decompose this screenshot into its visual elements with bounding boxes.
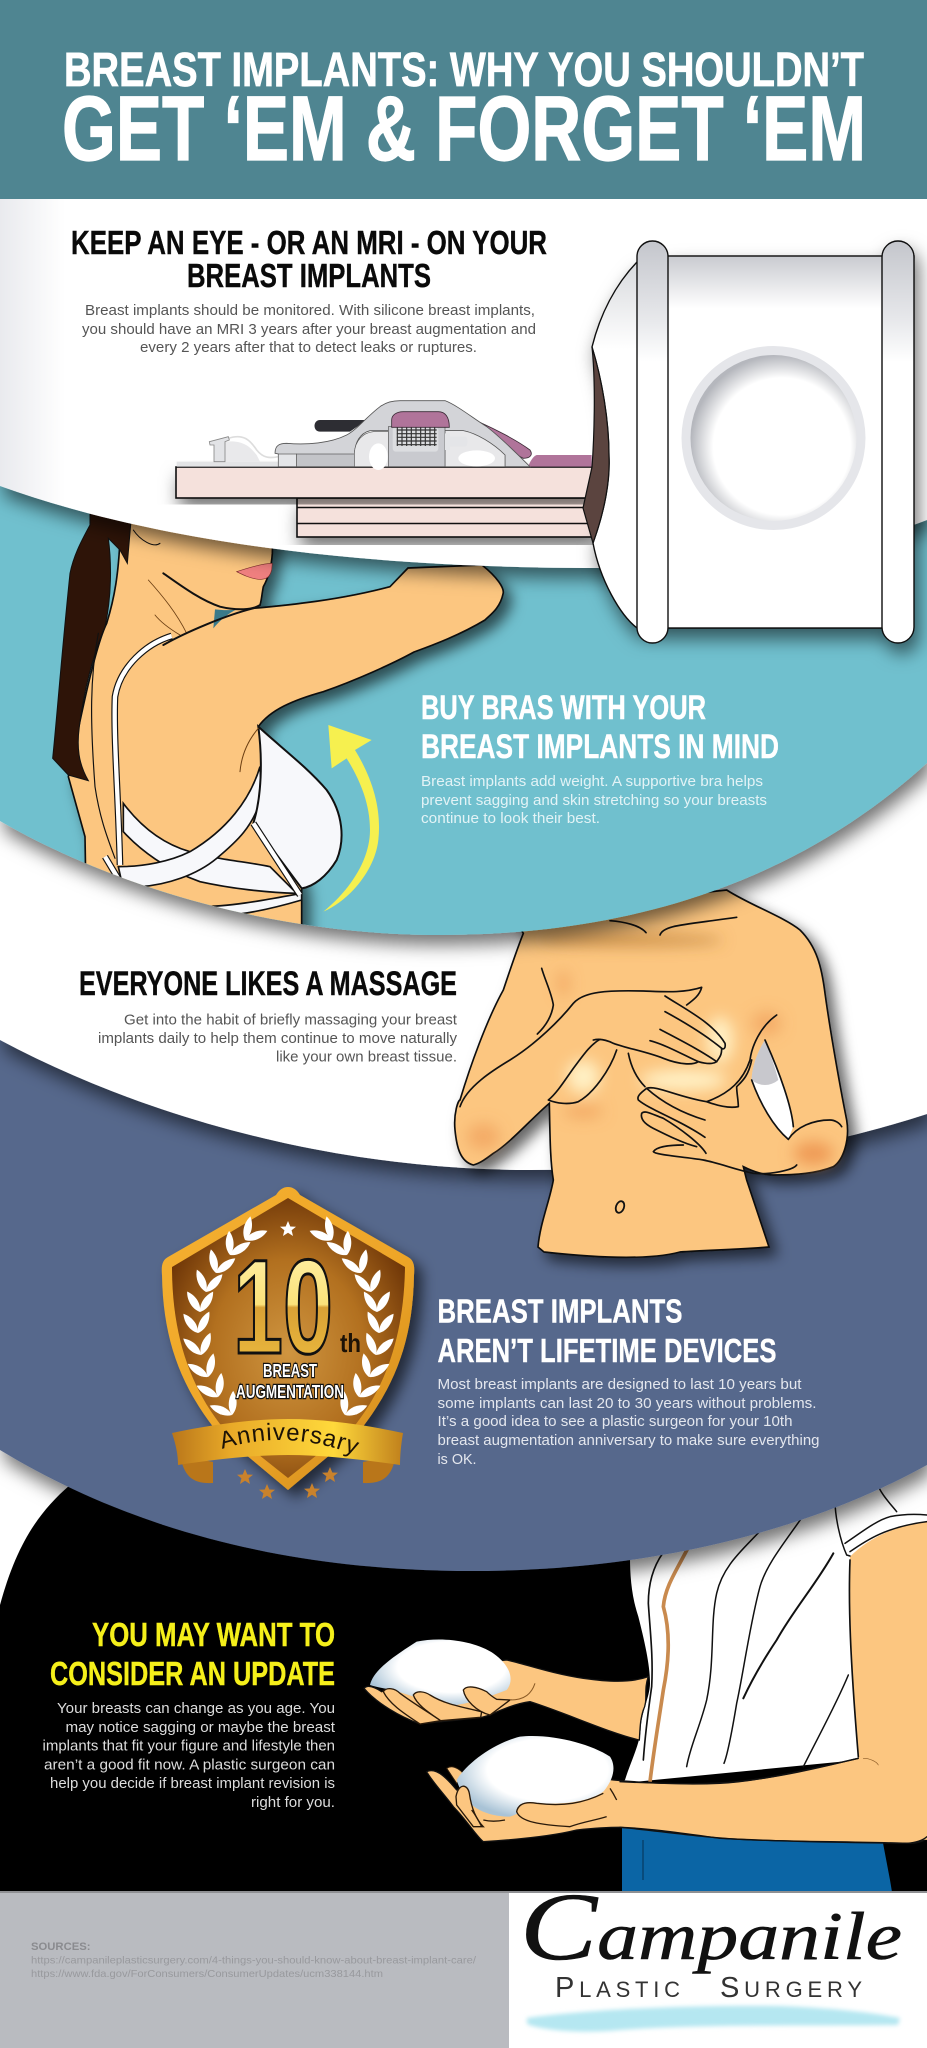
pants crease <box>642 1840 644 1880</box>
logo subtitle: SURGERY <box>720 1972 862 2004</box>
arm gap shading <box>752 1040 778 1085</box>
blush and highlights <box>467 934 833 1165</box>
lower forearm and hand <box>427 1736 927 1843</box>
heading: KEEP AN EYE - OR AN MRI - ON YOUR <box>71 224 547 261</box>
navel <box>614 1200 626 1214</box>
pants <box>622 1825 892 1892</box>
text block: lifetime devices: is OK. <box>438 1451 476 1468</box>
text block: lifetime devices: some implants can last 20 to 30 years without problems. <box>438 1395 816 1412</box>
text block: massage section: implants daily to help them continue to move naturally <box>98 1030 458 1047</box>
panel: massage background <box>0 600 927 1170</box>
stand arch <box>275 401 530 467</box>
th: th <box>340 1328 361 1358</box>
illustration: woman holding implants <box>364 1437 927 1892</box>
upper forearm and hand <box>364 1639 648 1740</box>
woman figure <box>53 513 503 937</box>
text block: lifetime devices: breast augmentation anniversary to make sure everything <box>438 1432 820 1449</box>
mesh grid <box>397 427 437 446</box>
illustration: MRI machine <box>583 241 914 643</box>
shield outer <box>162 1187 414 1490</box>
shirt folds and arm lines <box>620 1482 927 1843</box>
main table board <box>176 467 594 498</box>
upper fingers <box>383 1687 510 1724</box>
body text: Most breast implants are designed to last 10 years but <box>438 1376 802 1393</box>
light tray <box>177 462 278 467</box>
text block: bras section: BREAST IMPLANTS IN MIND <box>421 728 779 766</box>
footer: sources: https://www.fda.gov/ForConsumers/ConsumerUpdates/ucm338144.htm <box>31 1968 383 1980</box>
body text: Breast implants add weight. A supportive bra helps <box>421 773 763 790</box>
text block: MRI section: BREAST IMPLANTS <box>187 257 431 294</box>
illustration: MRI table <box>176 401 594 537</box>
heading: BREAST IMPLANTS <box>438 1292 682 1330</box>
bore opening <box>583 347 609 543</box>
pink strip <box>528 455 592 467</box>
text block: bras section: continue to look their best. <box>421 810 600 827</box>
text block: update section: CONSIDER AN UPDATE <box>50 1655 335 1692</box>
bore ring <box>682 346 866 530</box>
sources label: SOURCES: <box>31 1941 90 1953</box>
breast scanner apparatus <box>177 401 592 470</box>
text block: massage section: like your own breast tissue. <box>276 1048 457 1066</box>
illustration: woman massaging breasts <box>455 890 848 1257</box>
bra straps <box>105 636 300 895</box>
lower implant <box>457 1736 613 1817</box>
top star <box>280 1221 296 1236</box>
logo subtitle <box>555 1972 862 2004</box>
heading: BUY BRAS WITH YOUR <box>421 689 706 727</box>
thumb lines <box>472 1788 617 1827</box>
text block: MRI section <box>71 224 547 356</box>
machine shadow and front <box>592 241 914 643</box>
laurel right <box>308 1216 396 1420</box>
heading: EVERYONE LIKES A MASSAGE <box>79 965 457 1003</box>
knob <box>445 433 467 450</box>
lower arm fill <box>427 1758 927 1843</box>
anniversary text: Anniversary <box>222 1422 360 1456</box>
arrow: yellow lift arrow <box>323 725 379 912</box>
scanner box <box>388 427 445 467</box>
panel: lifetime devices background <box>0 1000 927 1571</box>
text block: massage section <box>79 965 458 1066</box>
bottom stars <box>237 1467 338 1499</box>
sensor <box>209 437 229 462</box>
right opening light <box>458 450 495 466</box>
left opening light <box>369 443 388 470</box>
body lines <box>460 917 842 1174</box>
body text: Get into the habit of briefly massaging your breast <box>124 1012 458 1028</box>
text block: bras section <box>421 689 779 827</box>
panel: bras background <box>0 440 927 935</box>
sensor wire <box>228 437 278 458</box>
sources background <box>0 1892 509 2048</box>
gap under chin <box>213 609 237 628</box>
logo background <box>509 1893 927 2048</box>
breast label: BREAST <box>263 1361 317 1381</box>
title banner <box>0 0 927 199</box>
text block: update section: implants that fit your figure and lifestyle then <box>42 1738 335 1754</box>
black handle <box>314 420 367 432</box>
upper arm fill <box>364 1660 648 1740</box>
text block: MRI section: every 2 years after that to detect leaks or ruptures. <box>140 339 477 356</box>
left opening <box>354 432 388 467</box>
footer: sources <box>0 1891 927 2048</box>
panel: update section <box>0 1437 927 1892</box>
text block: lifetime devices <box>438 1292 820 1468</box>
ribbon tails <box>180 1455 396 1483</box>
shirt <box>620 1437 927 1783</box>
bra cup <box>253 727 342 888</box>
augmentation label: AUGMENTATION <box>236 1382 344 1402</box>
right upper arm <box>849 1522 927 1840</box>
thumb <box>517 1783 620 1827</box>
badge: 10th anniversary shield <box>162 1187 430 1503</box>
text block: update section <box>42 1616 336 1811</box>
bra bands <box>123 803 297 893</box>
scanner panel <box>393 427 438 452</box>
text block: bras section: prevent sagging and skin stretching so your breasts <box>421 792 767 809</box>
upper implant <box>370 1639 511 1705</box>
text block: lifetime devices: AREN’T LIFETIME DEVICES <box>438 1332 776 1369</box>
stand base <box>278 454 297 467</box>
left rib <box>637 241 668 643</box>
small finger behind implant <box>447 1767 465 1783</box>
heading: YOU MAY WANT TO <box>92 1616 335 1653</box>
brush stroke <box>527 2006 900 2032</box>
details of torso <box>460 917 842 1174</box>
wrist crease <box>510 1683 535 1700</box>
text block: update section: right for you. <box>251 1794 335 1811</box>
arm gap <box>752 1040 793 1139</box>
footer top rule <box>0 1891 927 1893</box>
pink head <box>392 412 449 427</box>
bore hole <box>690 355 856 521</box>
logo script: Campanile <box>520 1873 902 1980</box>
panel: MRI background <box>0 199 927 568</box>
stand base dark <box>297 454 354 467</box>
black background <box>0 1440 927 1892</box>
numeral 10: 10 <box>233 1233 333 1382</box>
shirt placket <box>650 1547 688 1782</box>
laurel left <box>181 1216 269 1420</box>
text block: lifetime devices: It’s a good idea to see a plastic surgeon for your 10th <box>438 1413 792 1430</box>
text block: update section: aren’t a good fit now. A plastic surgeon can <box>44 1756 335 1774</box>
face, neck and back lines <box>92 530 260 858</box>
banner background <box>0 0 927 199</box>
board lines <box>297 508 590 524</box>
text block: update section: may notice sagging or maybe the breast <box>66 1719 336 1736</box>
wire shade <box>225 441 260 462</box>
illustration: woman in white bra <box>53 513 503 937</box>
lips <box>237 563 272 579</box>
text block: update section: help you decide if breast implant revision is <box>50 1775 335 1792</box>
body text: Breast implants should be monitored. With silicone breast implants, <box>85 302 535 319</box>
lower table boards <box>297 498 593 537</box>
pink arm <box>480 422 531 458</box>
source links: https://campanileplasticsurgery.com/4-things-you-should-know-about-breast-implant-care/ <box>31 1954 476 1966</box>
body text: Your breasts can change as you age. You <box>57 1700 335 1717</box>
front finger <box>456 1786 483 1827</box>
shield inner <box>172 1198 405 1478</box>
right opening <box>445 431 505 467</box>
logo subtitle: PLASTIC <box>555 1972 680 2004</box>
body, neck and raised arm <box>68 513 503 937</box>
ribbon <box>172 1419 403 1465</box>
torso silhouette <box>455 890 848 1257</box>
text block: MRI section: you should have an MRI 3 years after your breast augmentation and <box>82 321 536 338</box>
footer: Campanile logo <box>509 1873 927 2048</box>
hair <box>53 513 132 781</box>
